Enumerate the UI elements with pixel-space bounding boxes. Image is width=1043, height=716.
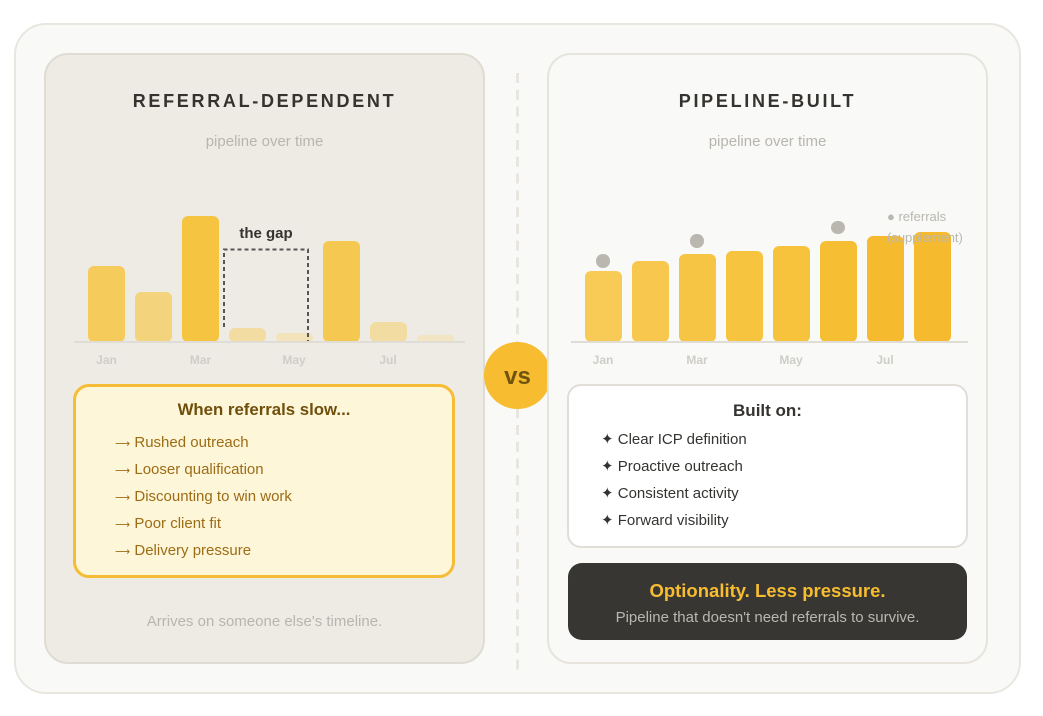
- card heading: Built on:: [733, 400, 802, 420]
- bar chart: pipeline-built: Mar: [686, 353, 708, 367]
- heading: pipeline-built: PIPELINE-BUILT: [679, 91, 856, 111]
- callout headline: Optionality. Less pressure.: [649, 580, 886, 600]
- bar chart: pipeline-built: Jan: [593, 353, 613, 367]
- gap annotation: the gap: [239, 224, 293, 242]
- legend: referrals supplement: (supplement): [887, 230, 963, 244]
- callout list: Poor client fit: [134, 515, 221, 532]
- callout list: ⟶: [115, 492, 130, 504]
- legend: referrals supplement: [887, 209, 963, 244]
- legend: referrals supplement: ● referrals: [887, 209, 946, 224]
- callout list: ⟶: [115, 518, 130, 530]
- callout: when referrals slow: [73, 384, 455, 578]
- card list: ✦ Forward visibility: [601, 512, 729, 529]
- callout list: [115, 434, 292, 559]
- bar chart: pipeline-built: [571, 221, 968, 367]
- card list: ✦ Proactive outreach: [601, 458, 743, 475]
- center dashed divider: [516, 73, 519, 670]
- card list: ✦ Consistent activity: [601, 485, 739, 502]
- bar chart: referral-dependent: May: [282, 353, 306, 367]
- panel: referral-dependent: [44, 53, 485, 664]
- callout list: Discounting to win work: [134, 488, 292, 505]
- card list: ✦ Clear ICP definition: [601, 431, 747, 448]
- panel: pipeline-built: [547, 53, 988, 664]
- card list: [601, 431, 747, 529]
- callout subline: Pipeline that doesn't need referrals to survive.: [616, 609, 919, 626]
- left caption: Arrives on someone else's timeline.: [147, 613, 382, 630]
- callout list: Looser qualification: [134, 461, 264, 478]
- callout list: Delivery pressure: [134, 542, 251, 559]
- bar chart: referral-dependent: Mar: [190, 353, 211, 367]
- card: built on: [567, 384, 968, 548]
- bar chart: pipeline-built: Jul: [876, 353, 894, 367]
- vs badge: vs: [504, 363, 531, 390]
- callout list: ⟶: [115, 438, 130, 450]
- callout list: Rushed outreach: [134, 434, 249, 451]
- subtitle: left: pipeline over time: [206, 133, 323, 150]
- bar chart: referral-dependent: Jan: [96, 353, 117, 367]
- gap annotation: [223, 224, 309, 341]
- callout: optionality: [568, 563, 967, 640]
- vs badge: [484, 342, 551, 409]
- heading: referral-dependent: REFERRAL-DEPENDENT: [133, 91, 396, 111]
- bar chart: referral-dependent: Jul: [379, 353, 397, 367]
- bar chart: pipeline-built: May: [779, 353, 803, 367]
- callout heading: When referrals slow...: [178, 400, 350, 418]
- subtitle: right: pipeline over time: [709, 133, 826, 150]
- callout list: ⟶: [115, 464, 130, 476]
- callout list: ⟶: [115, 546, 130, 558]
- bar chart: referral-dependent: [74, 216, 465, 367]
